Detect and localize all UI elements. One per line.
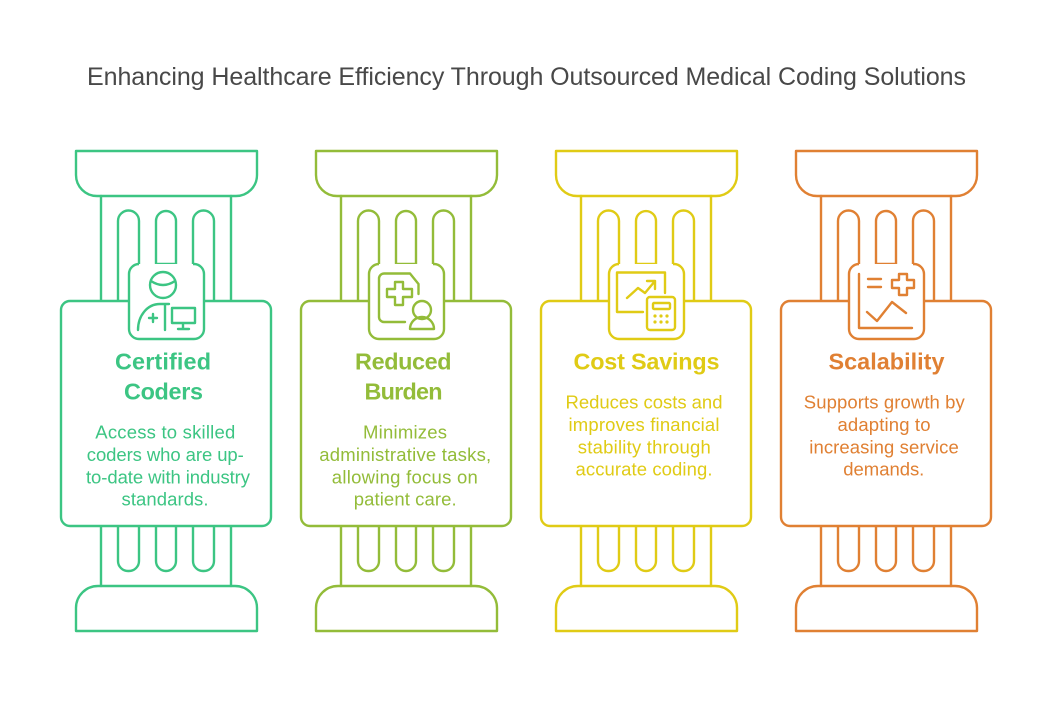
column base bbox=[316, 586, 497, 631]
heading: Coders bbox=[124, 378, 203, 404]
description: increasing service bbox=[809, 436, 959, 457]
description: demands. bbox=[843, 458, 924, 480]
column capital bbox=[316, 151, 497, 196]
heading: Scalability bbox=[828, 348, 944, 374]
panel: Certified Coders bbox=[61, 151, 271, 631]
icon: medical file with person bbox=[369, 264, 444, 339]
column base bbox=[796, 586, 977, 631]
description: Supports growth by bbox=[804, 392, 966, 412]
heading: Cost Savings bbox=[574, 348, 720, 374]
description: administrative tasks, bbox=[319, 444, 491, 465]
description bbox=[319, 422, 491, 510]
description: stability through bbox=[578, 436, 711, 457]
column base bbox=[76, 586, 257, 631]
description: accurate coding. bbox=[576, 458, 712, 480]
description: Access to skilled bbox=[95, 422, 235, 442]
column shaft bottom bbox=[821, 526, 951, 586]
card bbox=[61, 301, 271, 526]
description bbox=[86, 422, 251, 510]
card bbox=[301, 301, 511, 526]
icon: growth chart with medical cross bbox=[849, 264, 924, 339]
description: improves financial bbox=[568, 414, 720, 435]
heading bbox=[355, 348, 452, 404]
icon: chart with calculator bbox=[609, 264, 684, 339]
description bbox=[566, 392, 722, 480]
heading: Reduced bbox=[355, 348, 452, 374]
description bbox=[804, 392, 966, 480]
column base bbox=[556, 586, 737, 631]
description: coders who are up- bbox=[87, 444, 244, 465]
description: adapting to bbox=[838, 414, 930, 435]
column capital bbox=[796, 151, 977, 196]
heading bbox=[115, 348, 211, 404]
column capital bbox=[76, 151, 257, 196]
column shaft top bbox=[341, 196, 471, 301]
card bbox=[541, 301, 751, 526]
description: Minimizes bbox=[363, 422, 447, 442]
description: patient care. bbox=[354, 488, 457, 510]
description: allowing focus on bbox=[332, 466, 478, 487]
column shaft top bbox=[581, 196, 711, 301]
panel: Cost Savings bbox=[541, 151, 751, 631]
column shaft bottom bbox=[101, 526, 231, 586]
column shaft top bbox=[821, 196, 951, 301]
description: standards. bbox=[122, 488, 208, 510]
card bbox=[781, 301, 991, 526]
panel: Scalability bbox=[781, 151, 991, 631]
description: to-date with industry bbox=[86, 466, 251, 487]
column shaft bottom bbox=[341, 526, 471, 586]
description: Reduces costs and bbox=[566, 392, 722, 412]
heading: Burden bbox=[364, 378, 442, 404]
column shaft top bbox=[101, 196, 231, 301]
panel: Reduced Burden bbox=[301, 151, 511, 631]
column capital bbox=[556, 151, 737, 196]
heading: Certified bbox=[115, 348, 211, 374]
title: Enhancing Healthcare Efficiency Through Outsourced Medical Coding Solutions bbox=[87, 63, 966, 91]
column shaft bottom bbox=[581, 526, 711, 586]
icon: coder with monitor bbox=[129, 264, 204, 339]
